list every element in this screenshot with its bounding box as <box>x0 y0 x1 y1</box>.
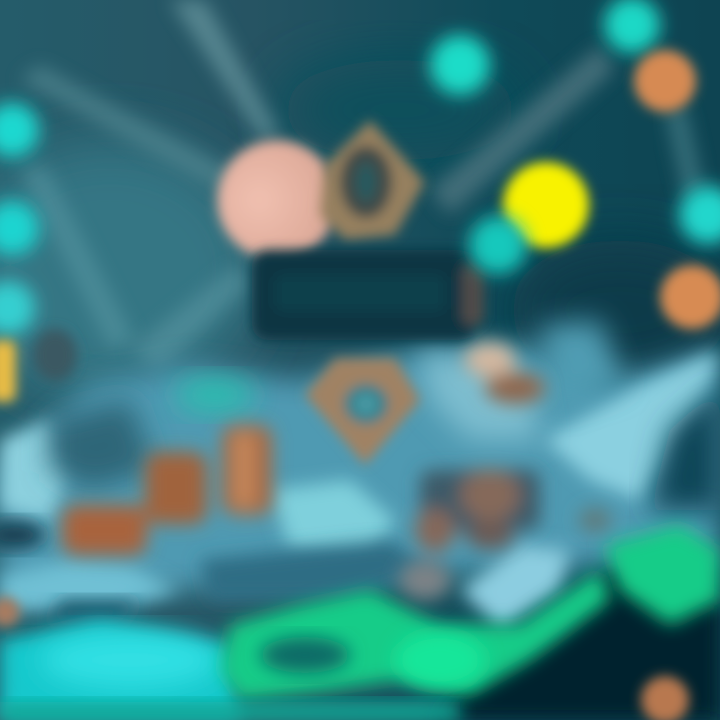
icon: rubble stack <box>399 469 611 600</box>
mountains <box>0 320 720 630</box>
icon: brown coin stacks <box>62 425 272 555</box>
icon: brown diamond badge <box>305 358 420 465</box>
icon: yellow node <box>503 162 589 248</box>
background glow and rays <box>0 0 720 400</box>
panel: dark screen <box>252 250 484 340</box>
icon: cyan nodes <box>0 0 720 335</box>
bottom glowing terrain <box>0 525 720 720</box>
icon: rock accent <box>464 342 545 404</box>
icon: brown house badge <box>320 120 425 240</box>
icon: pink sphere <box>217 140 337 260</box>
icon: left edge marker <box>0 329 77 402</box>
